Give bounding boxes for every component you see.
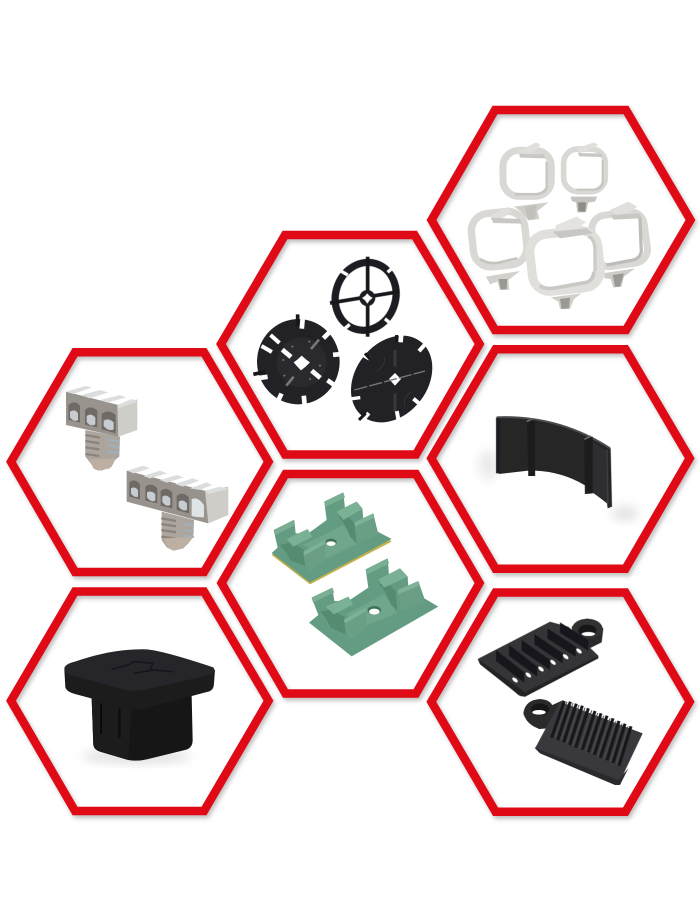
panel: black curved bracket xyxy=(431,349,692,572)
panel: green adhesive clips xyxy=(222,474,482,696)
lower green clip xyxy=(309,558,438,656)
product: five white loop clips xyxy=(470,142,649,309)
hexagon frame xyxy=(431,592,690,812)
five-slot clip xyxy=(127,466,228,551)
panel: black square plug xyxy=(11,592,270,814)
upper green clip xyxy=(272,492,392,584)
panel: white cable loop clips xyxy=(432,110,692,333)
product: two black comb mounts with eyelets xyxy=(478,618,643,785)
product: black square end plug xyxy=(64,649,215,763)
hexagon frame xyxy=(222,474,480,694)
product: two green adhesive-base clips xyxy=(272,492,438,656)
product: three black spacer discs xyxy=(253,254,449,438)
hexagon frame xyxy=(432,110,690,330)
hexagon frame xyxy=(11,592,268,811)
three-slot clip xyxy=(66,386,137,471)
hexagon frame xyxy=(431,349,690,569)
spoked wheel disc xyxy=(327,254,405,338)
panel: black comb tie mounts xyxy=(431,592,692,815)
panel: black slotted discs xyxy=(221,235,482,458)
lower comb mount xyxy=(523,699,643,785)
product: two grey slot clips with threaded stems xyxy=(66,386,228,551)
panel: grey multi-slot push-in clips xyxy=(11,352,270,575)
product: curved black channel xyxy=(478,417,638,521)
hexagon frame xyxy=(11,352,268,572)
upper comb mount xyxy=(478,618,603,697)
hexagon frame xyxy=(221,235,480,454)
right notched disc xyxy=(334,320,449,438)
left notched disc xyxy=(253,314,345,408)
